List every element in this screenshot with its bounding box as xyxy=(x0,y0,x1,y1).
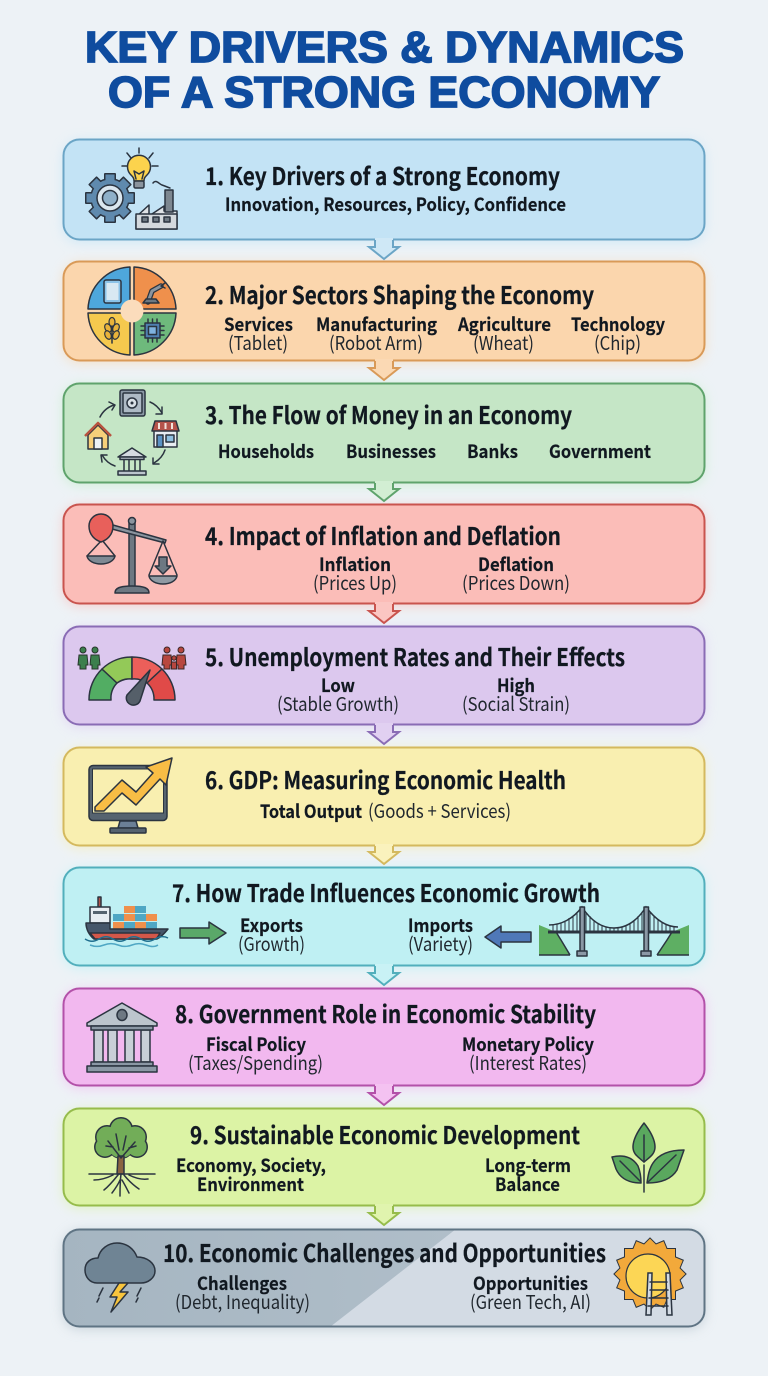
long-term balance: Long-term xyxy=(485,1152,571,1178)
sector: agriculture: (Wheat) xyxy=(473,329,534,356)
heading 7: 7. How Trade Influences Economic Growth xyxy=(172,874,600,909)
monetary policy: (Interest Rates) xyxy=(469,1049,587,1076)
arrow 1 to 2 xyxy=(369,238,399,259)
high unemployment: High xyxy=(497,672,535,698)
long-term balance: Balance xyxy=(495,1171,560,1197)
pillars: Environment xyxy=(197,1171,304,1197)
opportunities xyxy=(470,1270,591,1315)
low unemployment: (Stable Growth) xyxy=(277,690,399,717)
panel 2: major sectors xyxy=(64,262,704,360)
fiscal policy xyxy=(188,1031,323,1076)
sector: manufacturing xyxy=(316,311,437,356)
monetary policy xyxy=(462,1031,595,1076)
deflation: (Prices Down) xyxy=(462,569,570,596)
icon: storm cloud xyxy=(85,1243,155,1312)
panel 3: flow of money xyxy=(64,384,704,482)
glows xyxy=(63,141,705,1329)
icon: monitor with growth arrow xyxy=(89,758,172,833)
icon: balance scale with balloon xyxy=(87,514,177,593)
exports xyxy=(238,912,305,957)
heading 2: 2. Major Sectors Shaping the Economy xyxy=(205,276,594,311)
sector: technology: (Chip) xyxy=(594,329,641,356)
imports xyxy=(408,912,473,957)
arrow 2 to 3 xyxy=(369,359,399,380)
title: OF A STRONG ECONOMY xyxy=(108,68,660,117)
opportunities: (Green Tech, AI) xyxy=(470,1288,591,1315)
label: government: Government xyxy=(549,438,651,464)
monetary policy: Monetary Policy xyxy=(462,1031,595,1057)
icon: money flow cycle xyxy=(85,390,179,475)
subtitle 1: Innovation, Resources, Policy, Confidence xyxy=(225,191,566,217)
icon: gauge with people xyxy=(78,647,186,705)
arrow 3 to 4 xyxy=(369,481,399,501)
long-term balance xyxy=(485,1152,571,1197)
fiscal policy: Fiscal Policy xyxy=(206,1031,307,1057)
panel 8: government xyxy=(64,988,704,1086)
GDP definition: Total Output xyxy=(260,798,362,824)
pillars xyxy=(176,1152,326,1197)
sector: agriculture xyxy=(457,311,551,356)
heading 6: 6. GDP: Measuring Economic Health xyxy=(205,761,566,796)
panel 5: unemployment xyxy=(64,626,704,724)
label: banks: Banks xyxy=(467,438,518,464)
sector: services: Services xyxy=(224,311,293,337)
arrow: exports xyxy=(180,922,226,944)
sector: technology: Technology xyxy=(571,311,666,337)
heading 1: 1. Key Drivers of a Strong Economy xyxy=(205,157,560,192)
heading 5: 5. Unemployment Rates and Their Effects xyxy=(205,638,625,673)
pillars: Economy, Society, xyxy=(176,1152,326,1178)
heading 8: 8. Government Role in Economic Stability xyxy=(175,995,596,1030)
sector: manufacturing: (Robot Arm) xyxy=(329,329,423,356)
imports: (Variety) xyxy=(408,930,473,957)
inflation xyxy=(313,551,397,596)
panel 9: sustainability xyxy=(64,1108,704,1206)
icon: cargo ship xyxy=(85,897,168,946)
heading 10: 10. Economic Challenges and Opportunities xyxy=(163,1234,606,1269)
icon: suspension bridge xyxy=(539,907,689,956)
sector: services: (Tablet) xyxy=(228,329,288,356)
challenges xyxy=(175,1270,310,1315)
panel 6: GDP xyxy=(64,748,704,846)
fiscal policy: (Taxes/Spending) xyxy=(188,1049,323,1076)
deflation xyxy=(462,551,570,596)
icon: tree with roots xyxy=(89,1117,155,1196)
arrow 8 to 9 xyxy=(369,1084,399,1105)
heading 9: 9. Sustainable Economic Development xyxy=(190,1116,580,1151)
icon: government building xyxy=(87,1003,157,1072)
panel 1: key drivers xyxy=(64,140,704,240)
label: businesses: Businesses xyxy=(346,438,436,464)
high unemployment: (Social Strain) xyxy=(462,690,570,717)
panel 4: inflation and deflation xyxy=(64,504,704,604)
arrow 7 to 8 xyxy=(369,964,399,985)
label: households: Households xyxy=(218,438,314,464)
inflation: (Prices Up) xyxy=(313,569,397,596)
icon: green leaves xyxy=(612,1123,684,1192)
exports: (Growth) xyxy=(238,930,305,957)
challenges: Challenges xyxy=(197,1270,287,1296)
panel 10: challenges and opportunities xyxy=(63,1229,704,1327)
title: KEY DRIVERS & DYNAMICS xyxy=(85,23,684,72)
GDP definition xyxy=(260,797,511,824)
low unemployment xyxy=(277,672,399,717)
deflation: Deflation xyxy=(478,551,554,577)
arrow 6 to 7 xyxy=(369,844,399,864)
sector: agriculture: Agriculture xyxy=(457,311,551,337)
low unemployment: Low xyxy=(321,672,355,698)
imports: Imports xyxy=(408,912,473,938)
title xyxy=(85,23,684,117)
sector: manufacturing: Manufacturing xyxy=(316,311,437,337)
panel 7: trade xyxy=(64,868,704,966)
arrow 9 to 10 xyxy=(369,1204,399,1225)
opportunities: Opportunities xyxy=(473,1270,588,1296)
arrow: imports xyxy=(485,926,531,948)
arrow 4 to 5 xyxy=(369,602,399,623)
GDP definition: (Goods + Services) xyxy=(368,797,511,824)
exports: Exports xyxy=(240,912,303,938)
high unemployment xyxy=(462,672,570,717)
challenges: (Debt, Inequality) xyxy=(175,1288,310,1315)
icon: sun with ladder xyxy=(615,1239,685,1315)
sector: technology xyxy=(571,311,666,356)
heading 3: 3. The Flow of Money in an Economy xyxy=(205,396,572,431)
heading 4: 4. Impact of Inflation and Deflation xyxy=(205,517,561,552)
icon: sector wheel xyxy=(88,267,176,355)
icon: gear, light bulb and factory xyxy=(85,148,177,229)
arrow 5 to 6 xyxy=(369,723,399,744)
inflation: Inflation xyxy=(319,551,391,577)
sector: services xyxy=(224,311,293,356)
